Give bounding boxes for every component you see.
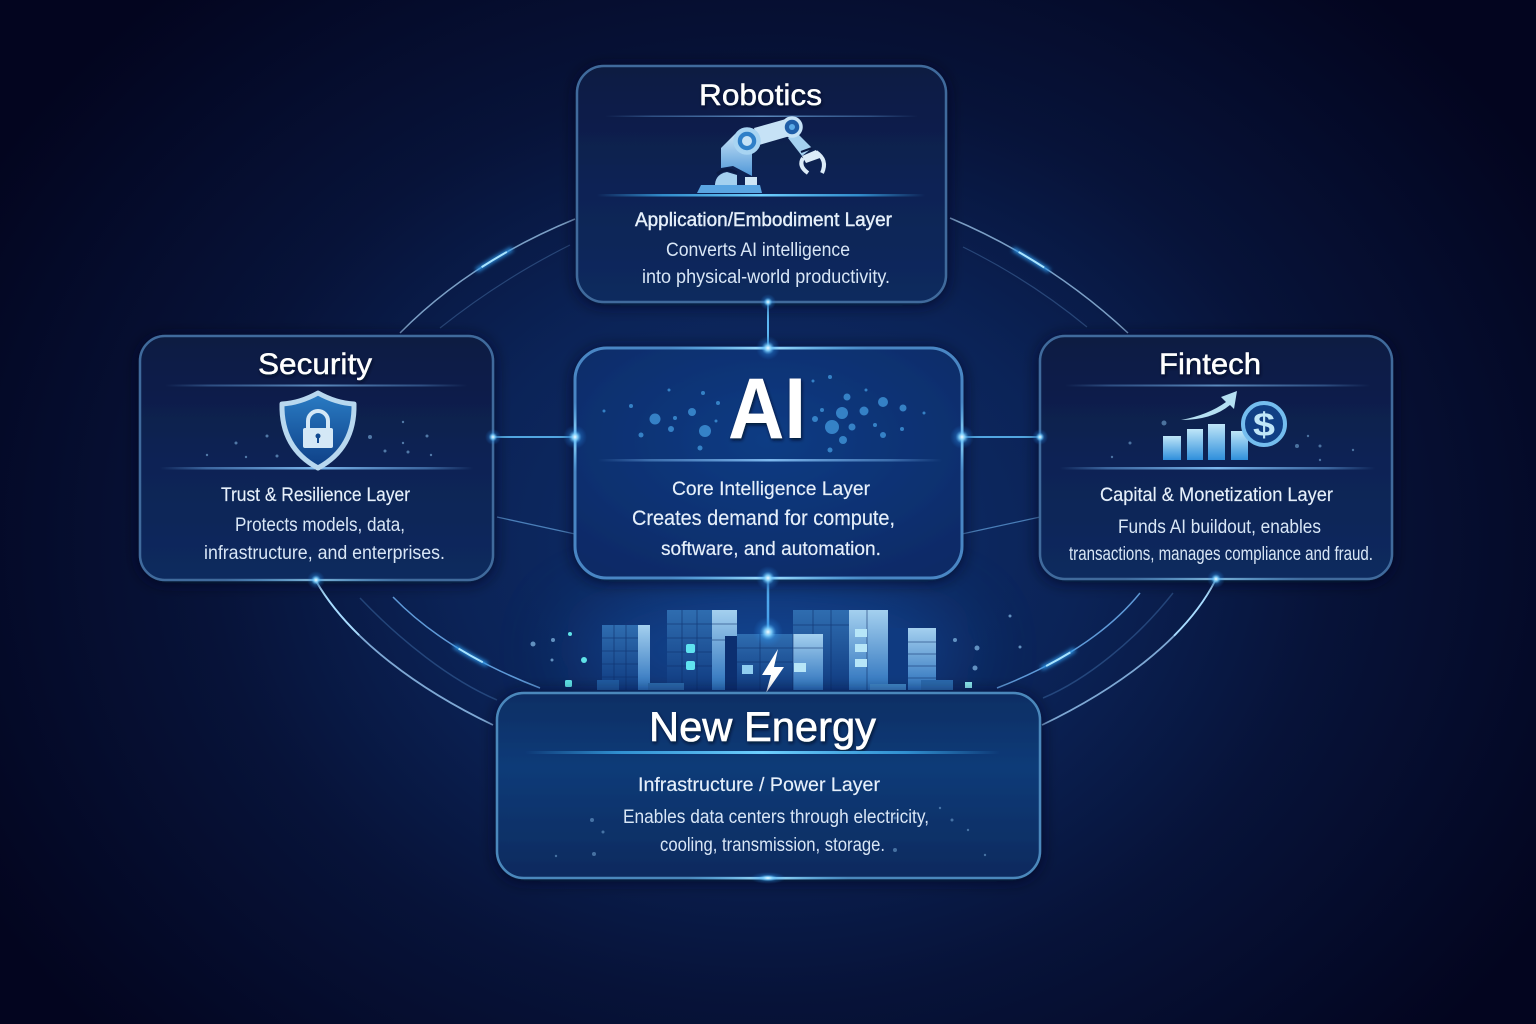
icon: shield with padlock xyxy=(282,393,354,468)
divider xyxy=(525,751,1000,754)
data center icon with lightning bolt xyxy=(530,600,1022,700)
particles xyxy=(555,807,986,857)
subtitle: Application/Embodiment Layer xyxy=(635,210,893,231)
subtitle: Core Intelligence Layer xyxy=(672,479,871,500)
card: Robotics xyxy=(577,66,946,302)
icon: growth bars with dollar coin: $ xyxy=(1253,406,1275,443)
neural particles left xyxy=(602,388,720,450)
divider bottom xyxy=(160,467,473,470)
description line 2: transactions, manages compliance and fraud. xyxy=(1069,544,1373,565)
description: Creates demand for compute, xyxy=(632,507,895,530)
divider top xyxy=(165,384,467,386)
subtitle: Trust & Resilience Layer xyxy=(221,485,411,506)
subtitle: Infrastructure / Power Layer xyxy=(638,775,881,796)
description line 2: cooling, transmission, storage. xyxy=(660,835,885,856)
divider xyxy=(598,459,942,462)
title: Security: Security xyxy=(258,348,372,381)
description: Converts AI intelligence xyxy=(666,240,850,261)
divider top xyxy=(605,116,918,117)
title: Robotics: Robotics xyxy=(699,79,822,112)
description: Enables data centers through electricity, xyxy=(623,807,929,828)
title: Fintech: Fintech xyxy=(1159,348,1261,381)
divider top xyxy=(1065,384,1370,386)
description line 2: software, and automation. xyxy=(661,539,881,560)
title: AI: AI xyxy=(728,361,806,457)
divider bottom xyxy=(597,194,925,196)
particles xyxy=(1111,420,1354,461)
icon: growth bars with dollar coin xyxy=(1163,391,1285,460)
icon: robotic arm xyxy=(697,118,824,193)
card: Fintech xyxy=(1040,336,1392,579)
description line 2: infrastructure, and enterprises. xyxy=(204,543,445,564)
description: Funds AI buildout, enables xyxy=(1118,517,1321,538)
neural particles right xyxy=(812,375,926,452)
description line 2: into physical-world productivity. xyxy=(642,267,890,288)
connectors between AI and outer cards xyxy=(493,302,1040,632)
orbit arcs xyxy=(316,218,1215,725)
card: New Energy xyxy=(497,693,1040,878)
glowing connector nodes xyxy=(225,294,1305,884)
card: AI core xyxy=(575,348,962,578)
divider bottom xyxy=(1060,467,1375,470)
particles xyxy=(206,421,432,458)
title: New Energy: New Energy xyxy=(649,703,876,750)
subtitle: Capital & Monetization Layer xyxy=(1100,485,1334,506)
card: Security xyxy=(140,336,493,580)
description: Protects models, data, xyxy=(235,515,405,536)
